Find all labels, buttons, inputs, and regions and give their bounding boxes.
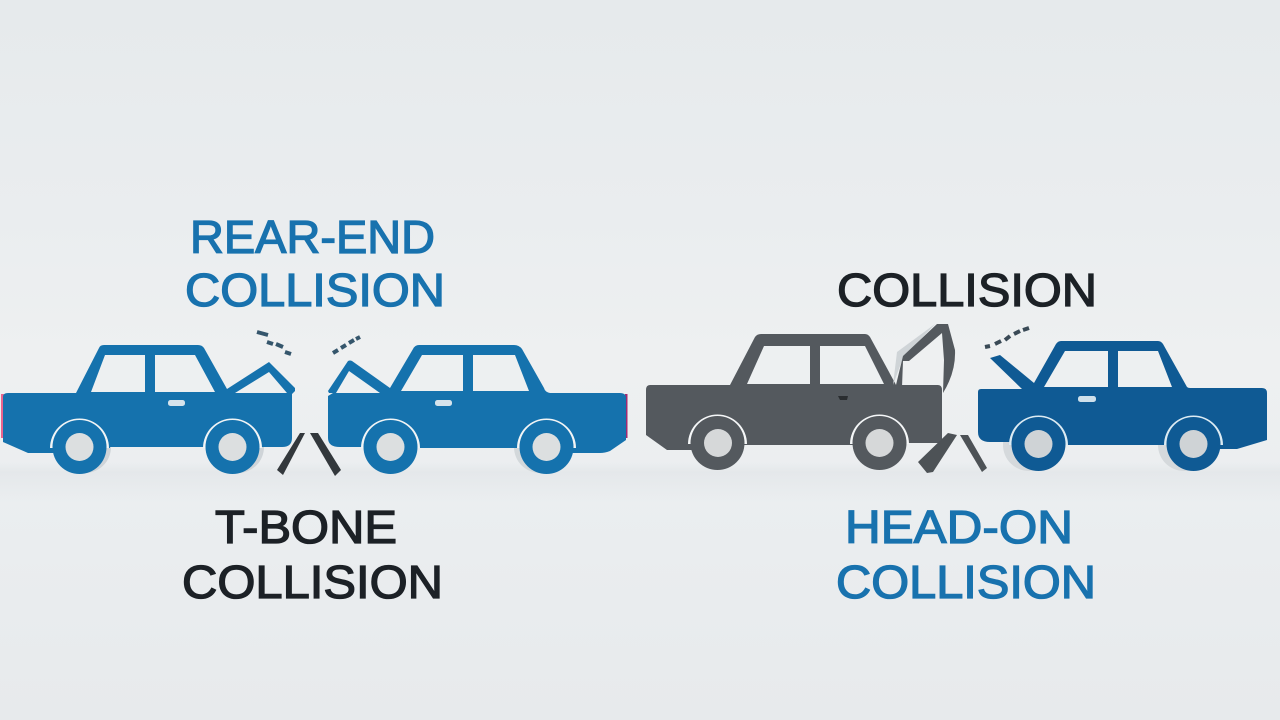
impact sparks: blue left — [257, 332, 291, 354]
car: grey — [646, 334, 942, 470]
label: t-bone collision — [182, 501, 443, 608]
debris: blue pair — [277, 433, 341, 476]
car: blue left — [1, 345, 295, 474]
label: rear-end collision: REAR-END — [190, 211, 435, 263]
raised hood: grey — [893, 324, 955, 393]
label: head-on collision: COLLISION — [836, 556, 1096, 608]
car: navy — [978, 341, 1267, 471]
label: t-bone collision: T-BONE — [215, 501, 397, 553]
label: collision: COLLISION — [837, 264, 1097, 316]
label: head-on collision: HEAD-ON — [845, 501, 1073, 553]
label: head-on collision — [836, 501, 1096, 608]
impact sparks: navy — [985, 328, 1029, 347]
label: rear-end collision: COLLISION — [185, 264, 445, 316]
debris: grey pair — [918, 433, 987, 473]
car: blue right — [328, 345, 628, 474]
label: rear-end collision — [185, 211, 445, 316]
impact sparks: blue right — [333, 337, 360, 353]
label: t-bone collision: COLLISION — [182, 556, 443, 608]
